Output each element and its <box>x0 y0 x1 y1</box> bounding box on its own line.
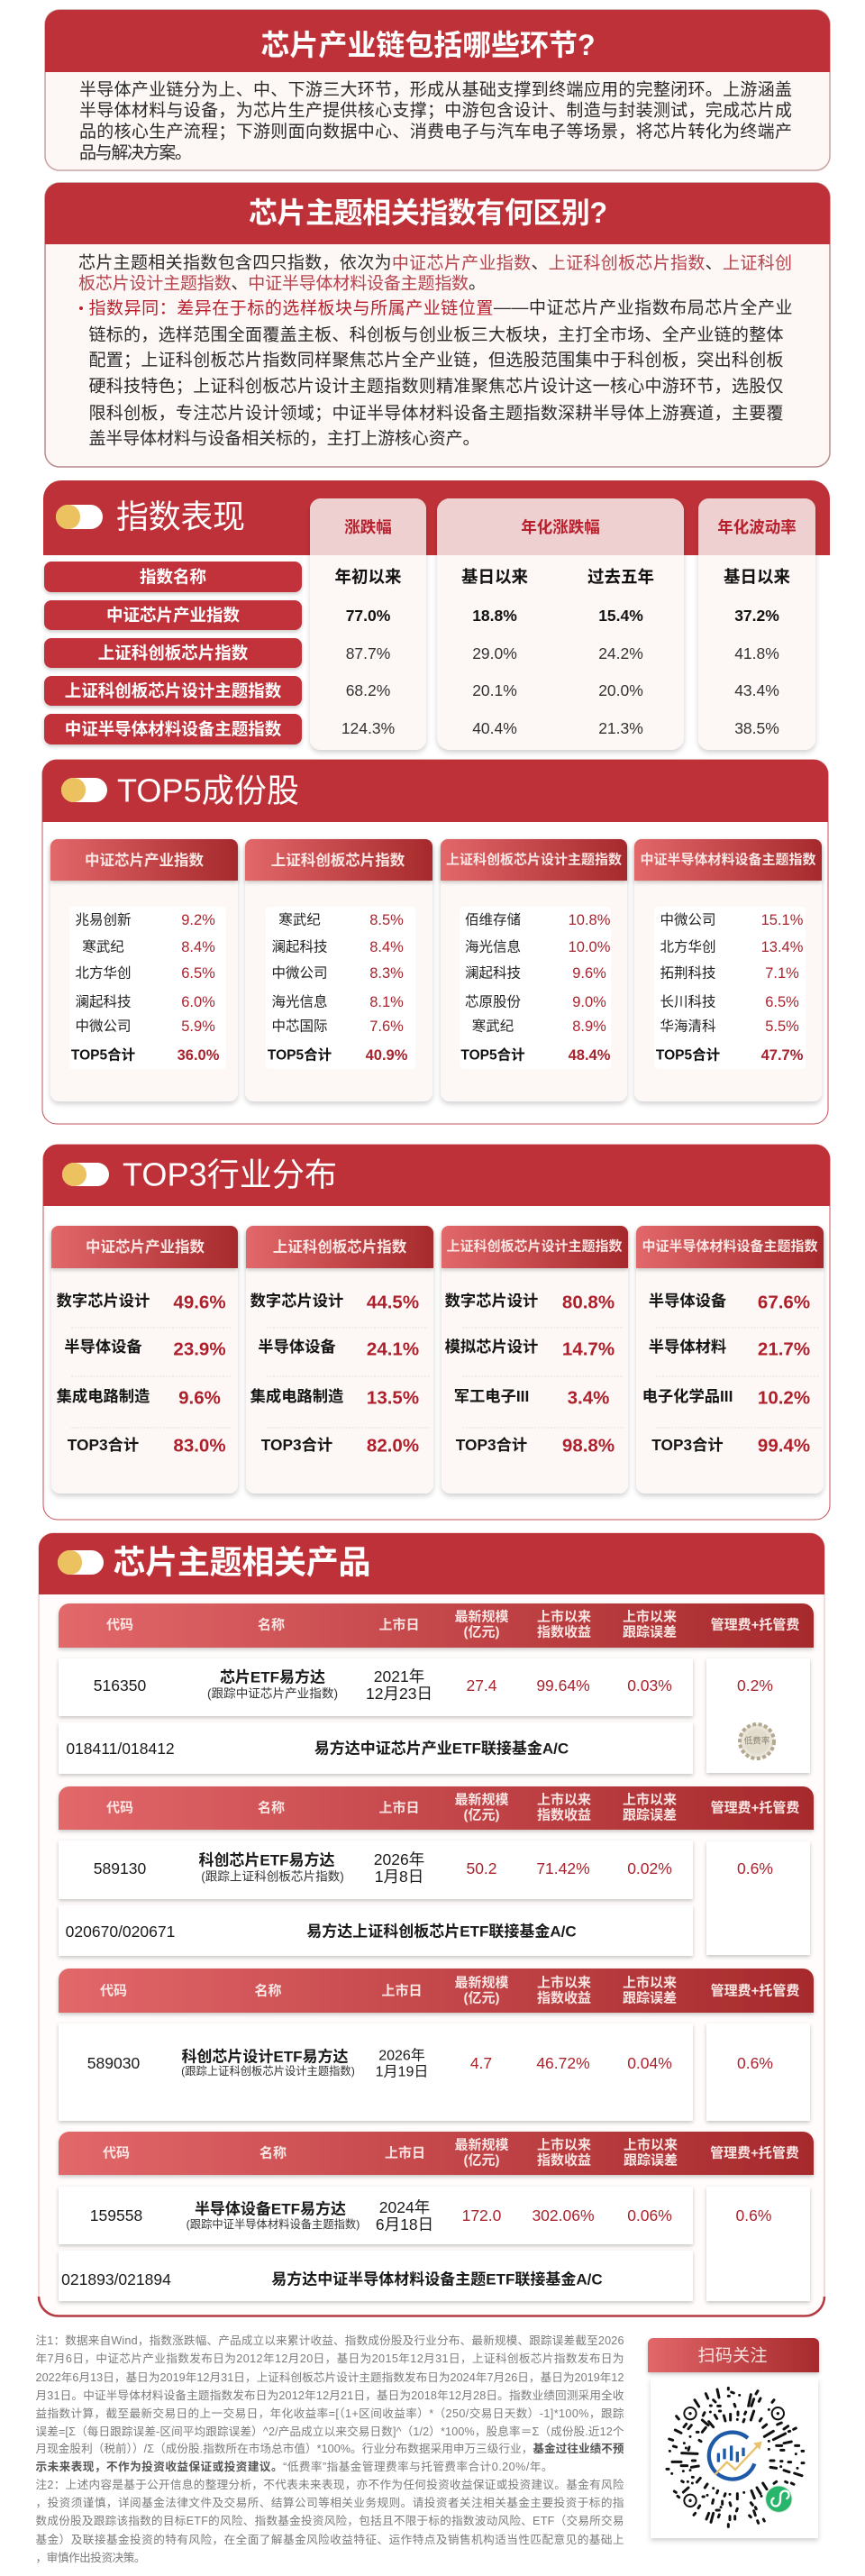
card: CSI chip industry index: 中证芯片产业指数 <box>85 852 204 869</box>
card: CSI chip industry index: 中证芯片产业指数 <box>86 1238 205 1256</box>
card: CSI chip industry index: 9.2% <box>181 912 215 928</box>
card: SSE STAR chip design index: 数字芯片设计 <box>445 1292 538 1310</box>
product table: chip ETF: 12月23日 <box>366 1685 432 1703</box>
icon: toggle pill <box>61 778 107 802</box>
card: CSI chip industry index: 半导体设备 <box>64 1338 142 1356</box>
table column: annualised volatility: 年化波动率 <box>717 518 797 536</box>
text block: similarities and differences: 硬科技特色；上证科创板芯片设计主题指数则精准聚焦芯片设计这一核心中游环节，选股仅 <box>88 377 784 397</box>
card: SSE STAR chip index <box>245 839 432 1101</box>
table column: annualised change: 29.0% <box>472 644 517 662</box>
product table: STAR chip ETF: 0.02% <box>627 1859 672 1877</box>
card: SSE STAR chip design index <box>442 1226 628 1494</box>
card: SSE STAR chip design index: TOP5合计 <box>460 1046 525 1064</box>
card: SSE STAR chip index: 上证科创板芯片指数 <box>271 852 405 869</box>
product table: STAR chip ETF: 最新规模 <box>454 1792 509 1808</box>
text block: industry chain description: 半导体材料与设备，为芯片生产提供核心支撑；中游包含设计、制造与封装测试，完成芯片成 <box>79 101 792 121</box>
section header bar <box>43 480 830 555</box>
card: CSI semiconductor materials and equipment index: 中证半导体材料设备主题指数 <box>640 851 816 867</box>
card: CSI chip industry index <box>50 839 238 1101</box>
product table: STAR chip design ETF: 1月19日 <box>376 2064 428 2080</box>
card: SSE STAR chip design index: 寒武纪 <box>472 1017 514 1035</box>
table row labels <box>44 562 302 744</box>
table column: annualised volatility: 37.2% <box>734 607 779 625</box>
card: CSI semiconductor materials and equipment index: 6.5% <box>765 994 799 1010</box>
card: CSI chip industry index <box>51 1226 238 1494</box>
table column: annualised volatility: 基日以来 <box>724 568 790 586</box>
footnotes <box>36 2334 624 2564</box>
product table: STAR chip design ETF: 名称 <box>254 1983 282 1999</box>
product table: STAR chip ETF: 上市以来 <box>623 1792 677 1808</box>
product table: STAR chip design ETF: 管理费+托管费 <box>711 1983 799 1999</box>
product table: semiconductor equipment ETF: 2024年 <box>379 2198 430 2216</box>
product table: chip ETF: 上市以来 <box>537 1608 591 1624</box>
product table: STAR chip ETF: 易方达上证科创板芯片ETF联接基金A/C <box>306 1922 577 1940</box>
card: SSE STAR chip index: 中微公司 <box>271 964 328 981</box>
table column: change: 涨跌幅 <box>344 518 392 536</box>
card: SSE STAR chip design index: 48.4% <box>569 1047 611 1064</box>
icon: low fee seal: 低费率 <box>744 1736 770 1747</box>
card: CSI semiconductor materials and equipment index: TOP5合计 <box>656 1046 720 1064</box>
product table: STAR chip design ETF: 代码 <box>100 1983 127 1999</box>
panel: top 5 constituents <box>42 760 828 1124</box>
product table: semiconductor equipment ETF: 名称 <box>260 2145 287 2161</box>
icon: toggle pill <box>58 1550 104 1575</box>
card: CSI semiconductor materials and equipment index: 长川科技 <box>660 993 716 1009</box>
icon: toggle pill <box>62 1163 109 1186</box>
product table: chip ETF: 99.64% <box>536 1676 590 1694</box>
table column: change: 68.2% <box>346 681 390 699</box>
card: CSI semiconductor materials and equipment index: 北方华创 <box>660 939 716 955</box>
table column: change: 77.0% <box>346 607 391 625</box>
table column: annualised change: 24.2% <box>598 644 643 662</box>
text block: similarities and differences: 指数异同：差异在于标的选样板块与所属产业链位置——中证芯片产业指数布局芯片全产业 <box>88 297 793 317</box>
product table: chip ETF: 27.4 <box>466 1676 497 1694</box>
panel: top 3 industries <box>43 1145 830 1520</box>
card: CSI semiconductor materials and equipment index: 21.7% <box>758 1339 810 1359</box>
card: SSE STAR chip design index: 14.7% <box>562 1339 615 1359</box>
product table: STAR chip design ETF: 上市以来 <box>623 1974 677 1990</box>
card: SSE STAR chip index: 数字芯片设计 <box>250 1292 343 1310</box>
card: SSE STAR chip index: 8.5% <box>369 912 404 928</box>
product table: STAR chip design ETF: 最新规模 <box>454 1974 509 1990</box>
card: SSE STAR chip index: 82.0% <box>367 1435 419 1457</box>
product table: STAR chip ETF: 代码 <box>106 1801 133 1815</box>
heading: index performance: 指数表现 <box>116 498 245 535</box>
product table: chip ETF: 指数收益 <box>537 1624 591 1640</box>
product table: STAR chip design ETF: 2026年 <box>378 2048 425 2064</box>
card: CSI chip industry index: 36.0% <box>178 1047 220 1064</box>
footnotes: 误差=[Σ（每日跟踪误差-区间平均跟踪误差）^2/产品成立以来交易日数]^（1/2）*100%，股息率＝Σ（成份股.近12个 <box>36 2425 624 2438</box>
table row labels: 上证科创板芯片指数 <box>98 644 249 662</box>
text block: index list: 板芯片设计主题指数、中证半导体材料设备主题指数。 <box>78 273 486 293</box>
table row labels: 中证半导体材料设备主题指数 <box>65 719 282 739</box>
card: SSE STAR chip index: 8.3% <box>369 965 404 982</box>
footnotes: 示未来表现，不作为投资收益保证或投资建议。“低费率”指基金管理费率与托管费率合计0.20%/年。 <box>36 2460 553 2473</box>
table column: annualised change: 18.8% <box>472 607 517 625</box>
card: SSE STAR chip design index <box>441 839 627 1101</box>
card: CSI semiconductor materials and equipment index: TOP3合计 <box>651 1436 724 1454</box>
card: CSI semiconductor materials and equipment index: 电子化学品III <box>642 1387 733 1405</box>
product table: semiconductor equipment ETF: 0.06% <box>627 2206 672 2224</box>
product table: STAR chip ETF: 71.42% <box>536 1859 590 1877</box>
card: CSI chip industry index: 49.6% <box>173 1293 226 1312</box>
product table: STAR chip ETF: 020670/020671 <box>66 1923 175 1941</box>
product table: STAR chip design ETF: 指数收益 <box>537 1990 591 2006</box>
card: SSE STAR chip index: 24.1% <box>367 1339 419 1359</box>
card: CSI semiconductor materials and equipment index: 15.1% <box>761 912 804 928</box>
card: CSI chip industry index: 数字芯片设计 <box>57 1292 150 1310</box>
card: SSE STAR chip design index: 3.4% <box>568 1388 609 1408</box>
text block: index list <box>78 252 792 293</box>
card: CSI chip industry index: TOP5合计 <box>71 1046 135 1064</box>
product table: STAR chip ETF: (亿元) <box>463 1808 499 1822</box>
card: SSE STAR chip index: 7.6% <box>369 1019 404 1035</box>
product table: semiconductor equipment ETF: 159558 <box>90 2206 142 2224</box>
product table: semiconductor equipment ETF: 021893/021894 <box>61 2270 171 2288</box>
section header bar <box>42 760 828 822</box>
product table: STAR chip design ETF: 跟踪误差 <box>623 1990 677 2006</box>
card: SSE STAR chip index: 海光信息 <box>271 993 328 1009</box>
table column: annualised change: 21.3% <box>598 719 643 737</box>
panel: scan to follow <box>648 2338 819 2538</box>
footnotes: 数成份股及跟踪该指数的目标ETF的风险、指数基金投资风险，包括且不限于标的指数波动风险、ETF（交易所交易 <box>36 2514 624 2527</box>
table column: change: 124.3% <box>341 719 395 737</box>
card: SSE STAR chip design index: 10.8% <box>569 912 611 928</box>
product table: chip ETF: 跟踪误差 <box>623 1624 677 1640</box>
table column: annualised volatility <box>698 498 815 750</box>
icon: low fee seal <box>740 1724 774 1758</box>
product table: chip ETF: 代码 <box>106 1617 133 1633</box>
card: CSI chip industry index: 中微公司 <box>75 1019 132 1035</box>
product table: chip ETF: (亿元) <box>463 1624 499 1640</box>
table column: annualised volatility: 43.4% <box>734 681 779 699</box>
product table: chip ETF: 易方达中证芯片产业ETF联接基金A/C <box>314 1740 569 1758</box>
card: SSE STAR chip index: 集成电路制造 <box>250 1387 343 1405</box>
text block: industry chain description: 品的核心生产流程；下游则面向数据中心、消费电子与汽车电子等场景，将芯片转化为终端产 <box>79 122 792 142</box>
product table: STAR chip ETF: 上市以来 <box>537 1792 591 1808</box>
table column: annualised change: 年化涨跌幅 <box>521 518 600 536</box>
table column: annualised change: 基日以来 <box>461 568 528 586</box>
product table: semiconductor equipment ETF: 上市以来 <box>537 2136 591 2152</box>
heading: related products: 芯片主题相关产品 <box>114 1543 371 1581</box>
table column: annualised change: 过去五年 <box>587 568 654 586</box>
product table: chip ETF: 上市日 <box>378 1617 420 1633</box>
footnotes: ，审慎作出投资决策。 <box>36 2551 146 2564</box>
card: CSI chip industry index: TOP3合计 <box>68 1436 139 1454</box>
card: CSI chip industry index: 23.9% <box>173 1339 226 1359</box>
card: CSI chip industry index: 兆易创新 <box>75 912 132 928</box>
product table: semiconductor equipment ETF: 管理费+托管费 <box>710 2145 799 2161</box>
product table: STAR chip ETF: 589130 <box>94 1859 146 1877</box>
card: SSE STAR chip design index: 上证科创板芯片设计主题指数 <box>446 1238 623 1255</box>
card: SSE STAR chip design index: 模拟芯片设计 <box>445 1338 538 1356</box>
product table: semiconductor equipment ETF: 上市日 <box>385 2145 425 2161</box>
card: SSE STAR chip index: 半导体设备 <box>258 1338 336 1356</box>
card: CSI semiconductor materials and equipment index: 7.1% <box>765 965 799 982</box>
table column: annualised change: 20.0% <box>598 681 643 699</box>
product table: STAR chip design ETF: (跟踪上证科创板芯片设计主题指数) <box>181 2064 355 2078</box>
card: CSI semiconductor materials and equipment index: 半导体材料 <box>649 1338 726 1356</box>
product table: STAR chip design ETF: 0.04% <box>627 2054 672 2072</box>
product table: semiconductor equipment ETF: 易方达中证半导体材料设备主题ETF联接基金A/C <box>271 2270 603 2288</box>
heading: index differences: 芯片主题相关指数有何区别? <box>249 196 607 229</box>
product table: STAR chip design ETF: 589030 <box>87 2054 140 2072</box>
card: SSE STAR chip design index: 佰维存储 <box>465 912 521 928</box>
panel: index differences <box>45 183 830 467</box>
product table: semiconductor equipment ETF <box>59 2132 814 2301</box>
product table: semiconductor equipment ETF: (亿元) <box>463 2152 499 2169</box>
card: CSI chip industry index: 8.4% <box>181 939 215 955</box>
product table: STAR chip ETF: 名称 <box>258 1799 285 1815</box>
footnotes: ，投资须谨慎，详阅基金法律文件及交易所、结算公司等相关业务规则。请投资者关注相关基金主要投资于标的指 <box>36 2496 624 2509</box>
card: CSI chip industry index: 6.5% <box>181 965 215 982</box>
footnotes: 月31日。中证半导体材料设备主题指数发布日为2012年12月21日，基日为2018年12月28日。指数业绩回测采用全收 <box>36 2389 624 2402</box>
card: CSI semiconductor materials and equipment index: 47.7% <box>761 1047 804 1064</box>
card: CSI semiconductor materials and equipment index: 99.4% <box>758 1435 810 1457</box>
card: SSE STAR chip design index: 澜起科技 <box>465 964 521 981</box>
card: CSI chip industry index: 6.0% <box>181 994 215 1010</box>
table column: change: 年初以来 <box>334 568 402 586</box>
card: SSE STAR chip index: 寒武纪 <box>278 910 321 928</box>
product table: STAR chip design ETF: 4.7 <box>470 2054 492 2072</box>
product table: STAR chip ETF: 2026年 <box>374 1850 424 1868</box>
table row labels: 中证芯片产业指数 <box>106 606 240 625</box>
product table: semiconductor equipment ETF: 6月18日 <box>376 2215 433 2233</box>
table column: annualised change <box>437 498 684 750</box>
product table: STAR chip ETF: 管理费+托管费 <box>711 1799 799 1815</box>
card: SSE STAR chip design index: 9.0% <box>572 994 606 1010</box>
card: SSE STAR chip design index: 9.6% <box>572 965 606 982</box>
table row labels: 上证科创板芯片设计主题指数 <box>65 681 282 700</box>
table column: annualised change: 20.1% <box>472 681 517 699</box>
table row labels: 指数名称 <box>140 568 206 586</box>
product table: semiconductor equipment ETF: 代码 <box>103 2145 130 2161</box>
card: SSE STAR chip index: 40.9% <box>366 1047 408 1064</box>
panel: related products <box>39 1533 824 2316</box>
heading: top 5: TOP5成份股 <box>117 772 299 809</box>
QR header: 扫码关注 <box>697 2345 768 2365</box>
product table: semiconductor equipment ETF: 最新规模 <box>454 2136 509 2152</box>
product table: semiconductor equipment ETF: 跟踪误差 <box>624 2152 678 2169</box>
product table: semiconductor equipment ETF: 0.6% <box>736 2206 771 2224</box>
card: CSI semiconductor materials and equipment index: 10.2% <box>758 1388 810 1408</box>
card: CSI chip industry index: 北方华创 <box>75 964 132 981</box>
text block: similarities and differences: 限科创板，专注芯片设计领域；中证半导体材料设备主题指数深耕半导体上游赛道，主要覆 <box>88 404 784 424</box>
text block: similarities and differences: 链标的，选样范围全面覆盖主板、科创板与创业板三大板块，主打全市场、全产业链的整体 <box>88 324 784 344</box>
footnotes: 2022年6月13日，基日为2019年12月31日，上证科创板芯片设计主题指数发布日为2024年7月26日，基日为2019年12 <box>36 2370 624 2384</box>
footnotes: 注2：上述内容是基于公开信息的整理分析，不代表未来表现，亦不作为任何投资收益保证或投资建议。基金有风险 <box>36 2478 624 2491</box>
product table: STAR chip ETF: 指数收益 <box>537 1806 591 1822</box>
product table: STAR chip ETF: 50.2 <box>466 1859 497 1877</box>
product table: STAR chip ETF: 1月8日 <box>375 1868 423 1886</box>
card: CSI chip industry index: 83.0% <box>173 1435 226 1457</box>
product table: STAR chip ETF: (跟踪上证科创板芯片指数) <box>201 1869 344 1884</box>
card: CSI semiconductor materials and equipment index: 中微公司 <box>660 912 716 928</box>
card: SSE STAR chip design index: 军工电子III <box>454 1387 529 1405</box>
table column: annualised change: 40.4% <box>472 719 517 737</box>
card: SSE STAR chip index: TOP5合计 <box>268 1046 332 1064</box>
product table: chip ETF: 芯片ETF易方达 <box>220 1667 325 1685</box>
card: CSI semiconductor materials and equipment index: 中证半导体材料设备主题指数 <box>642 1238 818 1255</box>
product table: chip ETF: (跟踪中证芯片产业指数) <box>207 1687 338 1700</box>
text block: similarities and differences: 盖半导体材料与设备相关标的，主打上游核心资产。 <box>88 429 479 449</box>
product table: chip ETF: 018411/018412 <box>66 1740 175 1758</box>
card: SSE STAR chip design index: 10.0% <box>569 939 611 955</box>
product table: chip ETF: 2021年 <box>374 1667 424 1685</box>
text block: industry chain description: 品与解决方案。 <box>79 142 192 162</box>
table column: change: 87.7% <box>346 644 390 662</box>
icon: mini program code <box>667 2388 804 2526</box>
product table: STAR chip design ETF <box>59 1969 814 2121</box>
footnotes: 益指数计算，截至最新交易日的上一交易日，年化收益率=[（1+区间收益率）*（250/交易日天数）-1]*100%，跟踪 <box>36 2407 624 2420</box>
product table: chip ETF: 0.2% <box>737 1676 773 1694</box>
product table: STAR chip ETF: 跟踪误差 <box>623 1806 677 1822</box>
product table: STAR chip design ETF: 上市以来 <box>537 1974 591 1990</box>
product table: semiconductor equipment ETF: 172.0 <box>462 2206 502 2224</box>
card: SSE STAR chip design index: 98.8% <box>562 1435 615 1457</box>
text block: index list: 芯片主题相关指数包含四只指数，依次为中证芯片产业指数、上证科创板芯片指数、上证科创 <box>78 252 792 272</box>
card: CSI semiconductor materials and equipment index: 拓荆科技 <box>660 964 716 981</box>
QR header <box>648 2338 819 2372</box>
card: CSI chip industry index: 集成电路制造 <box>57 1387 150 1405</box>
card: SSE STAR chip design index: 上证科创板芯片设计主题指数 <box>446 851 622 867</box>
card: CSI semiconductor materials and equipment index: 半导体设备 <box>649 1292 727 1310</box>
product table: STAR chip ETF: 上市日 <box>378 1799 420 1815</box>
card: SSE STAR chip index <box>246 1226 433 1494</box>
panel: index performance <box>43 480 830 750</box>
footnotes: 基金）及联接基金投资的特有风险，在全面了解基金风险收益特征、运作特点及销售机构适当性匹配意见的基础上 <box>36 2533 624 2546</box>
product table: STAR chip ETF: 科创芯片ETF易方达 <box>198 1851 335 1869</box>
card: CSI semiconductor materials and equipment index <box>636 1226 824 1494</box>
card: CSI semiconductor materials and equipment index: 13.4% <box>761 939 804 955</box>
product table: chip ETF <box>59 1603 814 1774</box>
footnotes: 注1：数据来自Wind，指数涨跌幅、产品成立以来累计收益、指数成份股及行业分布、最新规模、跟踪误差截至2026 <box>36 2334 624 2347</box>
card: CSI chip industry index: 5.9% <box>181 1019 215 1035</box>
card: SSE STAR chip index: TOP3合计 <box>261 1436 332 1454</box>
card: SSE STAR chip index: 中芯国际 <box>271 1019 328 1035</box>
icon: toggle pill <box>56 505 103 529</box>
card: SSE STAR chip index: 8.4% <box>369 939 404 955</box>
product table: semiconductor equipment ETF: 半导体设备ETF易方达 <box>195 2199 346 2217</box>
heading: top 3: TOP3行业分布 <box>123 1156 337 1193</box>
table column: annualised volatility: 38.5% <box>734 719 779 737</box>
product table: STAR chip design ETF: 0.6% <box>737 2054 773 2072</box>
card: CSI chip industry index: 寒武纪 <box>82 937 124 955</box>
text block: similarities and differences: 配置；上证科创板芯片指数同样聚焦芯片全产业链，但选股范围集中于科创板，突出科创板 <box>88 350 784 370</box>
card: SSE STAR chip index: 澜起科技 <box>271 939 328 955</box>
product table: STAR chip design ETF: 上市日 <box>381 1983 423 1999</box>
product table: chip ETF: 上市以来 <box>623 1608 677 1624</box>
product table: STAR chip design ETF: 科创芯片设计ETF易方达 <box>181 2048 349 2066</box>
card: SSE STAR chip design index: 80.8% <box>562 1293 615 1312</box>
card: SSE STAR chip index: 44.5% <box>367 1293 419 1312</box>
heading: industry chain: 芯片产业链包括哪些环节? <box>261 29 595 61</box>
card: SSE STAR chip design index: 芯原股份 <box>465 993 521 1009</box>
card: CSI semiconductor materials and equipment index <box>634 839 822 1101</box>
product table: STAR chip ETF <box>59 1786 814 1956</box>
card: SSE STAR chip index: 上证科创板芯片指数 <box>273 1238 407 1256</box>
section header bar <box>43 1145 830 1206</box>
product table: semiconductor equipment ETF: 上市以来 <box>624 2136 678 2152</box>
product table: semiconductor equipment ETF: (跟踪中证半导体材料设备主题指数) <box>187 2217 360 2231</box>
product table: chip ETF: 最新规模 <box>454 1608 509 1624</box>
product table: chip ETF: 0.03% <box>627 1676 672 1694</box>
product table: STAR chip design ETF: 46.72% <box>536 2054 590 2072</box>
card: CSI chip industry index: 澜起科技 <box>75 993 132 1009</box>
text block: industry chain description <box>79 79 792 162</box>
product table: STAR chip ETF: 0.6% <box>737 1859 773 1877</box>
card: SSE STAR chip design index: 海光信息 <box>465 939 521 955</box>
card: SSE STAR chip index: 13.5% <box>367 1388 419 1408</box>
product table: semiconductor equipment ETF: 指数收益 <box>537 2152 591 2169</box>
card: CSI semiconductor materials and equipment index: 67.6% <box>758 1293 810 1312</box>
text block: industry chain description: 半导体产业链分为上、中、下游三大环节，形成从基础支撑到终端应用的完整闭环。上游涵盖 <box>79 79 792 99</box>
product table: STAR chip design ETF: (亿元) <box>463 1990 499 2006</box>
card: CSI semiconductor materials and equipment index: 5.5% <box>765 1019 799 1035</box>
product table: chip ETF: 名称 <box>258 1617 285 1633</box>
product table: chip ETF: 管理费+托管费 <box>711 1617 799 1633</box>
panel: industry chain <box>45 10 830 170</box>
card: SSE STAR chip index: 8.1% <box>369 994 404 1010</box>
card: CSI chip industry index: 9.6% <box>178 1388 221 1408</box>
product table: chip ETF: 516350 <box>94 1676 146 1694</box>
footnotes: 年7月6日，中证芯片产业指数发布日为2012年12月20日，基日为2015年12月31日，上证科创板芯片指数发布日为 <box>36 2352 624 2365</box>
table column: annualised change: 15.4% <box>598 607 643 625</box>
section header bar <box>39 1533 824 1594</box>
footnotes: 月现金股利（税前））/Σ（成份股.指数所在市场总市值）*100%。行业分布数据采用申万三级行业，基金过往业绩不预 <box>36 2442 624 2455</box>
table column: change <box>310 498 426 750</box>
card: CSI semiconductor materials and equipment index: 华海清科 <box>660 1019 716 1035</box>
product table: semiconductor equipment ETF: 302.06% <box>532 2206 595 2224</box>
card: SSE STAR chip design index: TOP3合计 <box>456 1436 527 1454</box>
table column: annualised volatility: 41.8% <box>734 644 779 662</box>
card: SSE STAR chip design index: 8.9% <box>572 1019 606 1035</box>
text block: similarities and differences <box>79 297 793 449</box>
